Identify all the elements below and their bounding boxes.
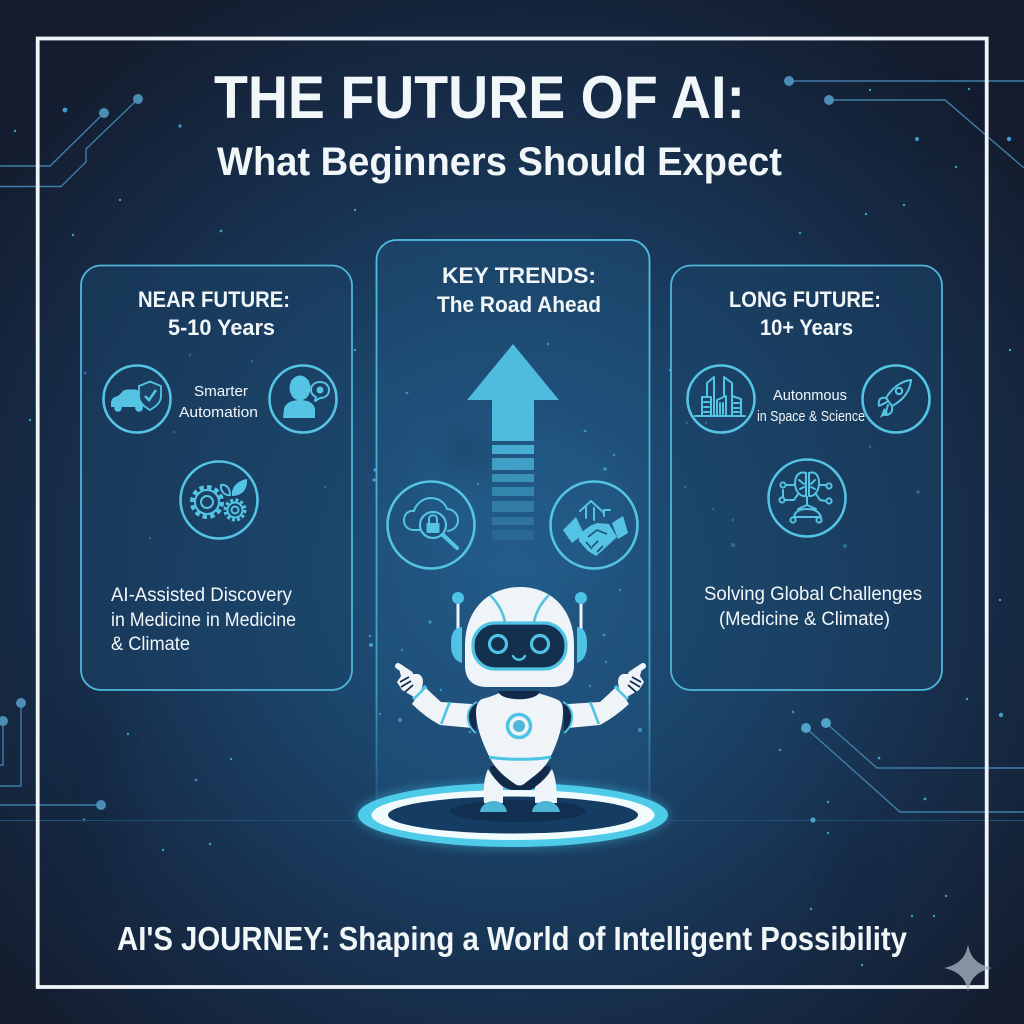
- panel: long future: [671, 266, 942, 690]
- heading: long future: LONG FUTURE:: [729, 287, 881, 312]
- heading: near future: NEAR FUTURE:: [138, 287, 290, 312]
- text: ai-assisted discovery: AI-Assisted Discovery: [111, 585, 292, 606]
- icon: sparkle watermark: [944, 944, 992, 992]
- robot arms: [412, 686, 629, 733]
- heading: near future: [138, 287, 290, 340]
- text: autonomous in space and science: Autonmous: [773, 388, 847, 404]
- icon: gears and leaf: [180, 462, 258, 538]
- arrow: upward: [467, 344, 559, 540]
- heading: long future: 10+ Years: [760, 315, 853, 340]
- robot hands pointing up: [397, 665, 644, 697]
- text: solving global challenges: Solving Global Challenges: [704, 584, 922, 605]
- heading: long future: [729, 287, 881, 340]
- icon: rocket: [862, 366, 930, 432]
- heading: key trends: The Road Ahead: [437, 292, 601, 317]
- text: autonomous in space and science: in Space & Science: [757, 409, 865, 425]
- icon: car and shield: [104, 366, 170, 432]
- text: solving global challenges: [704, 584, 922, 630]
- icon: person with speech bubble: [270, 366, 336, 432]
- text: ai-assisted discovery: [111, 585, 296, 655]
- icon: brain network and car: [768, 460, 846, 536]
- text: solving global challenges: (Medicine & Climate): [719, 609, 890, 630]
- platform: glowing ring: [357, 782, 669, 848]
- heading: key trends: KEY TRENDS:: [442, 263, 596, 288]
- text: autonomous in space and science: [757, 388, 865, 425]
- robot head: [465, 587, 574, 687]
- subtitle: What Beginners Should Expect: [217, 140, 782, 184]
- heading: near future: 5-10 Years: [168, 315, 275, 340]
- text: ai-assisted discovery: & Climate: [111, 634, 190, 655]
- icon: cloud security: [388, 482, 474, 568]
- icon: smart city: [688, 366, 754, 432]
- text: smarter automation: [179, 384, 258, 421]
- robot torso: [476, 691, 563, 786]
- text: smarter automation: Smarter: [194, 384, 248, 400]
- faint world map shapes: [60, 90, 960, 930]
- panel: key trends: [376, 240, 650, 800]
- robot antennas and ears: [451, 592, 587, 663]
- title: THE FUTURE OF AI:: [214, 64, 745, 131]
- footer tagline: AI'S JOURNEY: Shaping a World of Intelligent Possibility: [117, 920, 908, 957]
- robot legs and feet: [480, 766, 560, 812]
- heading: key trends: [437, 263, 601, 317]
- circuit lines: [0, 76, 1024, 823]
- robot: [397, 587, 644, 812]
- text: ai-assisted discovery: in Medicine in Medicine: [111, 610, 296, 631]
- panel: near future: [81, 266, 352, 690]
- icon: handshake: [550, 482, 638, 568]
- text: smarter automation: Automation: [179, 405, 258, 421]
